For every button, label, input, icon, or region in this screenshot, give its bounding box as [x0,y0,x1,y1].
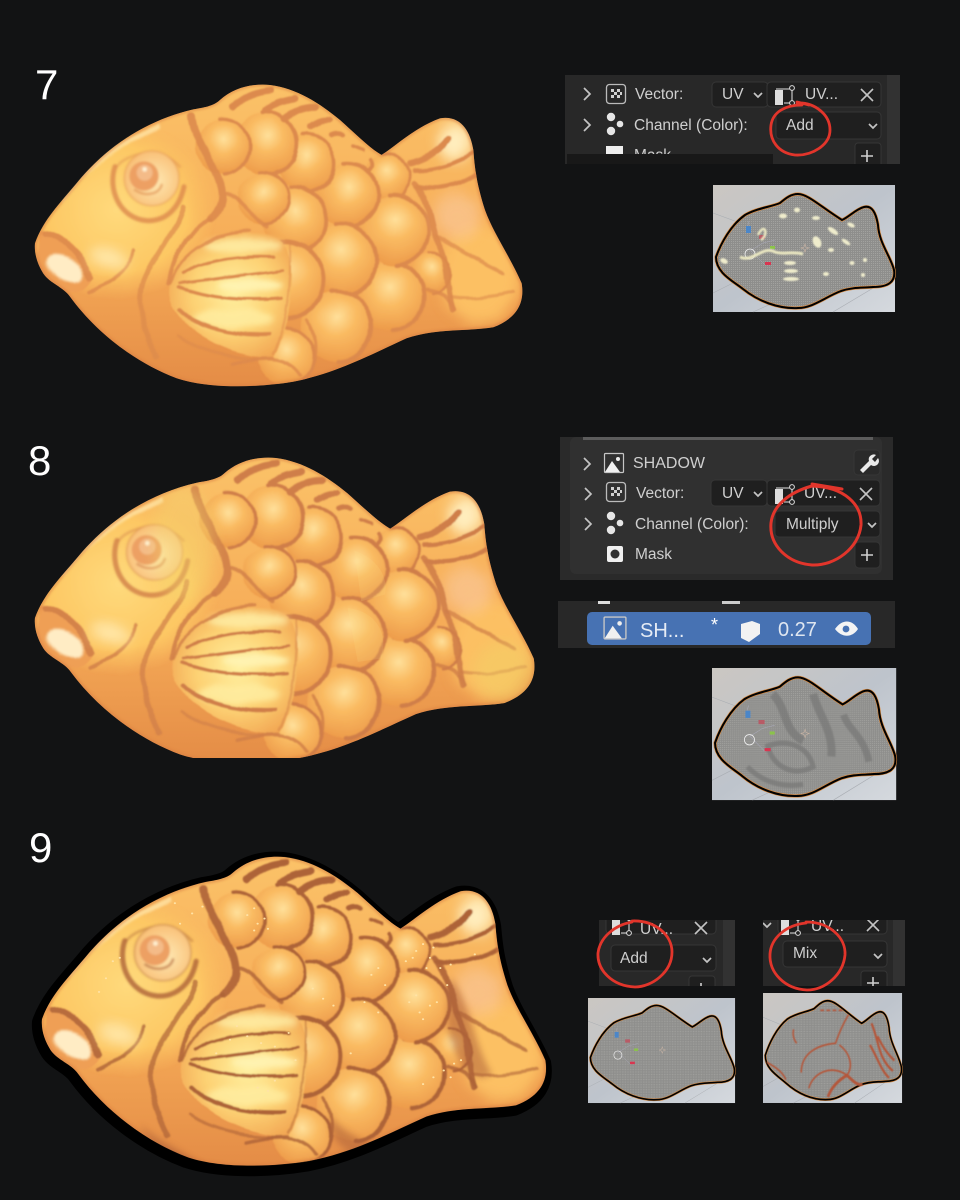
panel: step 8 shadow channel settings: UV... [804,485,837,502]
thumbnail: mix line map [763,993,902,1103]
darker tail and belly paint [140,978,492,1169]
panel: step 8 shadow channel settings: Vector: [636,485,684,502]
panel: step 9 Add setting: UV... [640,921,673,938]
panel: step 8 shadow channel settings: SHADOW [633,455,706,472]
panel: step 7 channel settings: Add [786,117,814,134]
hand-drawn circle: Mix [770,922,845,990]
soft shadow patches [153,487,535,702]
panel: step 7 channel settings: UV [722,86,744,103]
step number 9: 9 [29,824,52,871]
illustration: taiyaki fish step 9 with black outline [23,857,546,1169]
step number 8: 8 [28,437,51,484]
panel: active shadow layer row: SH... [640,620,684,642]
panel: step 8 shadow channel settings: Channel (Color): [635,516,749,533]
hand-drawn circle: Multiply [771,484,861,565]
panel: step 9 Mix setting [763,920,905,992]
panel: step 8 shadow channel settings [560,437,893,580]
panel: step 9 Mix setting: UV... [811,918,844,935]
panel: step 7 channel settings [565,75,900,168]
thumbnail: shadow map [712,668,896,800]
illustration: taiyaki fish step 8 [16,458,535,763]
hand-drawn circle: Add [598,921,672,987]
thumbnail: additive sparkle map [588,998,735,1103]
panel: step 9 Mix setting: Mix [793,945,817,962]
black halo outline [40,859,544,1168]
hand-drawn circle: Add [771,102,830,155]
panel: active shadow layer row [558,601,895,648]
thumbnail: additive highlight map [713,185,895,312]
panel: step 9 Add setting: Add [620,950,648,967]
panel: step 9 Add setting [596,920,735,988]
sparkles [99,903,475,1091]
panel: step 8 shadow channel settings: UV [722,485,744,502]
panel: step 7 channel settings: Mask [634,147,671,164]
panel: step 7 channel settings: Channel (Color): [634,117,748,134]
panel: step 8 shadow channel settings: Mask [635,546,672,563]
panel: active shadow layer row: * [711,615,718,635]
panel: active shadow layer row: 0.27 [778,619,817,641]
illustration: taiyaki fish step 7 [17,85,522,386]
panel: step 7 channel settings: Vector: [635,86,683,103]
step number 7: 7 [35,61,58,108]
panel: step 8 shadow channel settings: Multiply [786,516,839,533]
panel: step 7 channel settings: UV... [805,86,838,103]
